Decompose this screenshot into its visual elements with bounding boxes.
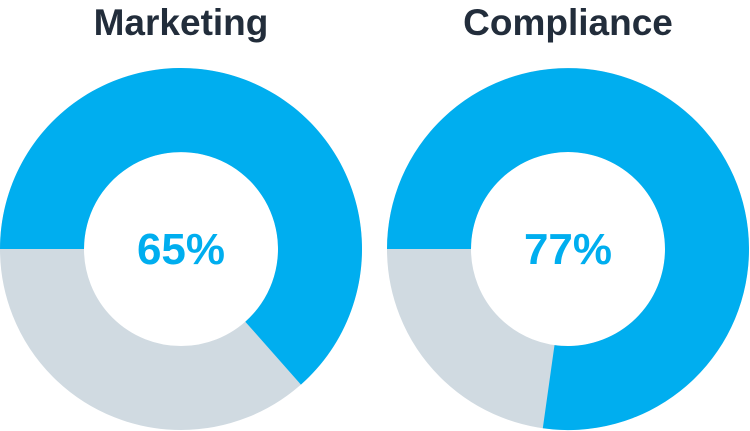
heading: Marketing: Marketing (94, 2, 268, 43)
heading: Compliance: Compliance (463, 2, 673, 43)
donut chart: Compliance 77% (387, 68, 749, 430)
donut chart: Marketing 65% (0, 68, 362, 388)
donut chart: Compliance 77%: 77% (524, 225, 612, 274)
donut chart: Marketing 65%: 65% (137, 225, 225, 274)
